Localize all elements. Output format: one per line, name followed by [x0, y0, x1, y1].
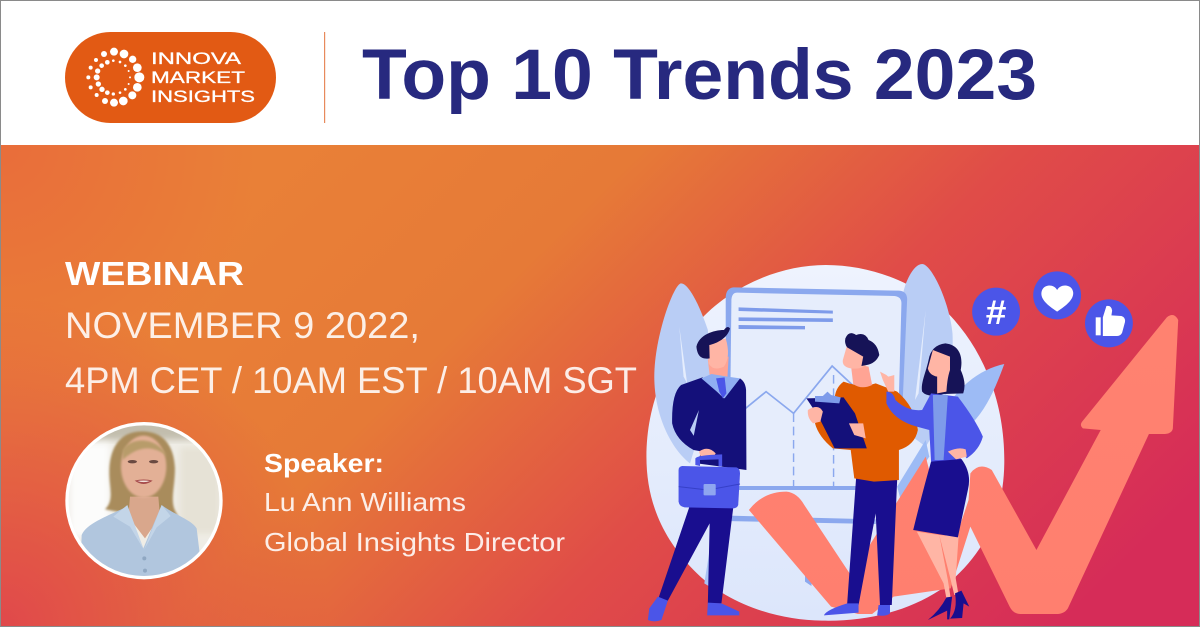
hand — [699, 449, 716, 457]
speaker portrait — [63, 420, 223, 583]
man with clipboard — [806, 333, 918, 616]
header divider — [324, 32, 325, 123]
shoes — [648, 597, 668, 621]
background gradient panel — [0, 145, 1200, 627]
shoes — [824, 603, 859, 615]
neck and face — [851, 363, 872, 387]
webinar details text — [65, 255, 637, 401]
small blue leaf — [947, 364, 1004, 433]
webinar details text: WEBINAR — [65, 255, 244, 292]
clipboard — [806, 397, 867, 448]
speaker text: Lu Ann Williams — [264, 487, 466, 517]
raised hand — [880, 372, 894, 392]
speaker text: Global Insights Director — [264, 527, 565, 557]
sweater — [672, 377, 746, 470]
logo dot ring — [86, 48, 144, 107]
hair — [845, 333, 879, 366]
header band — [0, 0, 1200, 145]
speaker text — [264, 448, 565, 557]
hands — [808, 407, 823, 423]
shirt — [81, 505, 200, 576]
face — [121, 436, 166, 498]
neck — [128, 497, 160, 538]
raised arm and jacket — [886, 392, 983, 463]
face and neck — [928, 350, 950, 393]
legs — [658, 505, 734, 603]
trousers — [847, 478, 897, 605]
left leaf — [654, 283, 711, 463]
logo: Innova Market Insights — [65, 32, 276, 123]
growth arrow — [749, 315, 1178, 614]
collar and tie — [701, 374, 740, 398]
hair back — [922, 343, 965, 396]
blouse — [933, 395, 948, 460]
title: Top 10 Trends 2023 — [362, 36, 1037, 115]
neck and head — [701, 357, 734, 393]
webinar details text: 4PM CET / 10AM EST / 10AM SGT — [65, 360, 637, 401]
right leaf — [899, 264, 953, 447]
logo wordmark: MARKET — [151, 68, 245, 87]
speaker text: Speaker: — [264, 448, 384, 478]
webinar details text: NOVEMBER 9 2022, — [65, 305, 420, 346]
board line chart — [744, 366, 861, 413]
logo wordmark: INSIGHTS — [151, 87, 255, 106]
presentation board — [704, 287, 907, 587]
eyes and mouth — [128, 460, 137, 463]
portrait backdrop — [68, 438, 220, 551]
hair — [105, 431, 178, 516]
sweater — [815, 382, 918, 482]
hand on hip — [948, 448, 967, 459]
man with briefcase — [648, 327, 746, 621]
briefcase — [695, 454, 722, 467]
illustration: team with growth chart — [646, 264, 1178, 621]
skirt — [913, 459, 969, 537]
icon: heart bubble — [1033, 271, 1081, 319]
light disc — [646, 265, 1004, 621]
icon: hashtag bubble: # — [986, 292, 1006, 332]
icon: hashtag bubble — [972, 288, 1020, 336]
legs — [917, 532, 959, 598]
board text lines — [739, 307, 833, 329]
icon: thumbs up bubble — [1085, 299, 1133, 347]
woman — [886, 343, 983, 620]
heels — [928, 597, 952, 620]
logo wordmark — [151, 49, 255, 106]
logo wordmark: INNOVA — [151, 49, 242, 68]
